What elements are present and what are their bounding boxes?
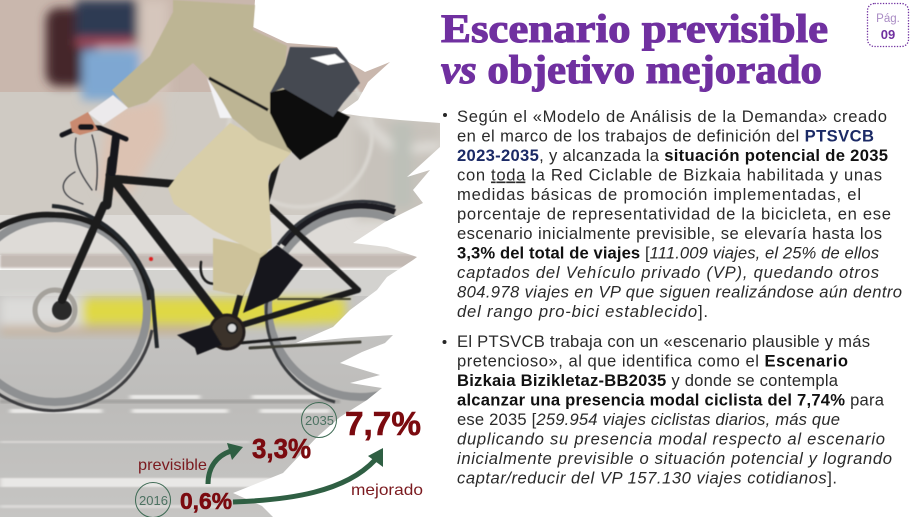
bullet	[443, 113, 447, 117]
title: Escenario previsible	[441, 6, 828, 51]
text block: escenario mejorado: pretencioso», al que identifica como el Escenario	[457, 352, 848, 370]
messenger bag	[209, 47, 360, 160]
arrow mejorado	[233, 448, 383, 502]
front wheel	[0, 206, 157, 411]
text block: escenario mejorado: ese 2035 [259.954 viajes ciclistas diarios, más que	[457, 410, 840, 429]
label mejorado: mejorado	[351, 482, 423, 499]
torn white edge of the photo	[233, 0, 910, 517]
rider: shirt	[207, 78, 234, 118]
year badge 2016	[136, 482, 170, 517]
rider: shirt cuff and hand	[70, 95, 128, 135]
text block: escenario previsible	[443, 107, 902, 321]
arrow previsible	[208, 443, 243, 484]
rider: trousers	[168, 123, 291, 254]
background: blurred street and pedestrian	[0, 0, 440, 517]
rider	[70, 0, 360, 355]
text block: escenario previsible: escenario inicialmente previsible, se elevaría hasta los	[457, 224, 882, 243]
text block: escenario previsible: medidas básicas de promoción implementadas, el	[457, 185, 861, 204]
bullet	[442, 340, 446, 344]
year badge 2016: 2016	[139, 493, 168, 508]
rider: jacket	[112, 0, 291, 153]
label previsible: previsible	[138, 457, 207, 474]
handlebar	[62, 127, 126, 172]
text block: escenario previsible: del rango pro-bici establecido].	[457, 302, 708, 321]
frame	[62, 135, 360, 349]
text block: escenario mejorado	[442, 332, 892, 488]
text block: escenario mejorado: captar/reducir del VP 157.130 viajes cotidianos].	[457, 468, 837, 488]
figure 7,7%: 7,7%	[345, 405, 421, 442]
rider: front shoe	[243, 245, 303, 313]
year badge 2035: 2035	[305, 413, 334, 428]
stats: modal share arrows and figures	[136, 402, 423, 517]
text block: escenario previsible: en el marco de los trabajos de definición del PTSVCB	[457, 126, 874, 146]
text block: escenario previsible: 804.978 viajes en VP que siguen realizándose aún dentro	[457, 282, 902, 302]
photo: cyclist on a street	[0, 0, 452, 517]
title	[441, 6, 828, 92]
text block: escenario previsible: porcentaje de representatividad de la bicicleta, en ese	[457, 204, 891, 224]
text block: escenario previsible: Según el «Modelo de Análisis de la Demanda» creado	[457, 107, 887, 126]
rear wheel	[266, 201, 452, 402]
year badge 2035	[302, 402, 336, 438]
rider: trailing leg and shoe	[177, 238, 268, 355]
title: vs objetivo mejorado	[441, 47, 822, 92]
text block: escenario previsible: captados del Vehículo privado (VP), quedando otros	[457, 263, 879, 282]
figure 0,6%: 0,6%	[180, 488, 232, 514]
text block: escenario previsible: 2023-2035, y alcanzada la situación potencial de 2035	[457, 146, 888, 165]
bicycle	[0, 127, 452, 411]
page badge	[868, 4, 908, 46]
page badge: Pág.	[876, 13, 900, 25]
text block: escenario previsible: con toda la Red Ciclable de Bizkaia habilitada y unas	[457, 166, 882, 184]
text block: escenario mejorado: Bizkaia Bizikletaz-BB2035 y donde se contempla	[457, 371, 839, 390]
text block: escenario previsible: 3,3% del total de viajes [111.009 viajes, el 25% de ellos	[457, 244, 879, 262]
red dot	[149, 257, 153, 261]
page badge: 09	[881, 27, 895, 42]
text block: escenario mejorado: alcanzar una presencia modal ciclista del 7,74% para	[457, 390, 885, 410]
text block: escenario mejorado: duplicando su presencia modal respecto al escenario	[457, 430, 885, 448]
text block: escenario mejorado: El PTSVCB trabaja con un «escenario plausible y más	[457, 332, 870, 351]
text block: escenario mejorado: inicialmente previsible o situación potencial y logrando	[457, 449, 892, 468]
figure 3,3%: 3,3%	[252, 433, 311, 464]
